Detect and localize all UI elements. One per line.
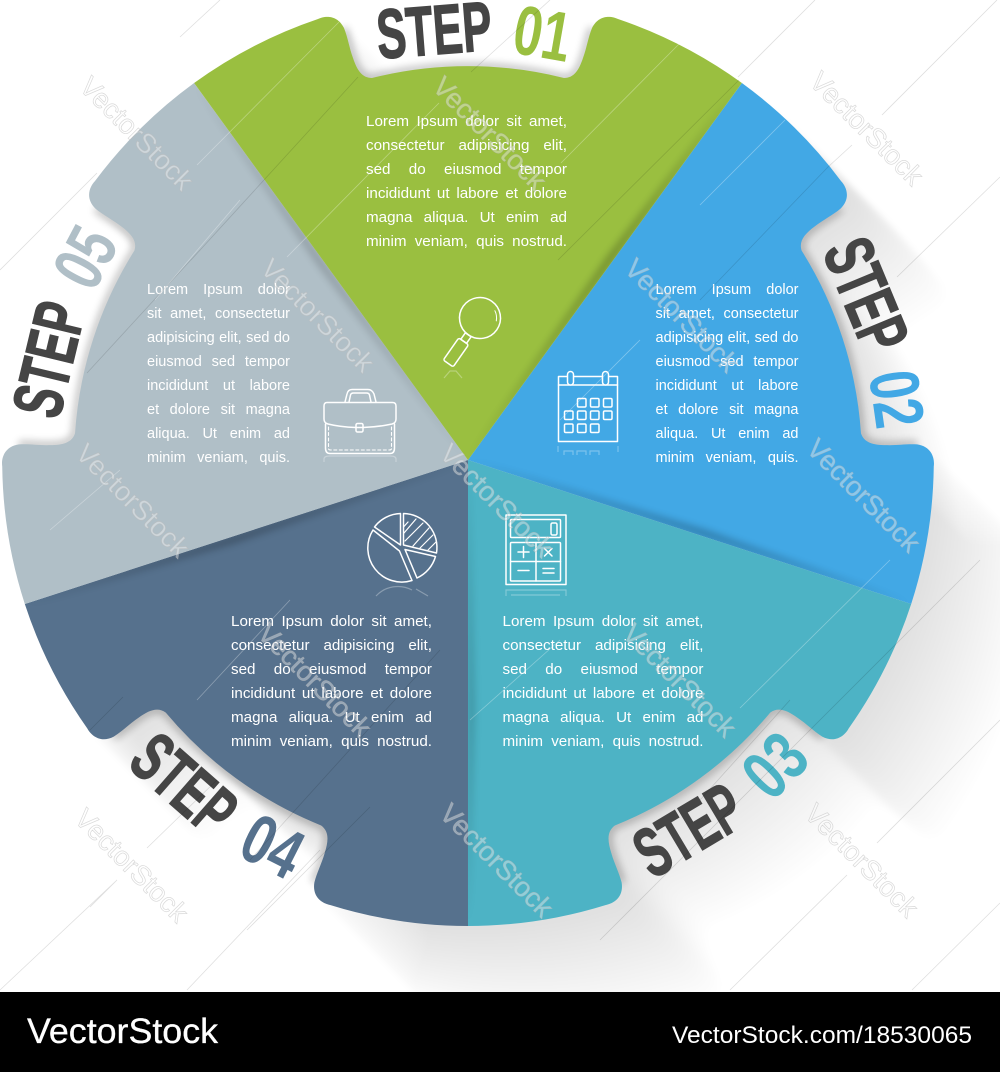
heading: step 01 <box>374 0 577 77</box>
text block: step 01: Lorem Ipsum dolor sit amet, <box>366 113 567 130</box>
text block: step 01: consectetur adipisicing elit, <box>366 137 567 154</box>
text block: step 02: minim veniam, quis. <box>656 450 798 466</box>
watermarks: VectorStock <box>804 66 930 191</box>
text block: step 05: et dolore sit magna <box>147 402 290 418</box>
watermarks <box>69 66 930 928</box>
text block: step 05: incididunt ut labore <box>147 378 290 394</box>
text block: step 02 <box>656 282 798 466</box>
watermarks: VectorStock <box>617 618 743 743</box>
text block: step 04: incididunt ut labore et dolore <box>231 685 432 702</box>
text block: step 04: magna aliqua. Ut enim ad <box>231 709 432 726</box>
heading: step 02 <box>804 224 951 445</box>
footer band <box>0 992 1000 1072</box>
text block: step 05: eiusmod sed tempor <box>147 354 290 370</box>
text block: step 04: sed do eiusmod tempor <box>231 661 432 678</box>
text block: step 02: adipisicing elit, sed do <box>656 330 798 346</box>
heading: step 03: 03 <box>727 718 824 814</box>
icon: magnifying glass <box>431 289 509 378</box>
text block: step 04 <box>231 613 432 750</box>
text block: step 05: adipisicing elit, sed do <box>147 330 290 346</box>
heading: step 03 <box>614 710 831 901</box>
heading: step 05: STEP <box>0 294 101 425</box>
text block: step 03: incididunt ut labore et dolore <box>502 685 704 702</box>
text block: step 04: minim veniam, quis nostrud. <box>231 733 432 750</box>
text block: step 03: magna aliqua. Ut enim ad <box>502 709 704 726</box>
text block: step 02: eiusmod sed tempor <box>656 354 798 370</box>
text block: step 01: minim veniam, quis nostrud. <box>366 233 567 250</box>
heading: step 04: STEP <box>116 718 252 851</box>
icon: calendar <box>558 372 618 455</box>
text block: step 01: sed do eiusmod tempor <box>366 161 567 178</box>
watermarks: VectorStock <box>74 71 200 196</box>
text block: step 01: magna aliqua. Ut enim ad <box>366 209 567 226</box>
text block: step 05: minim veniam, quis. <box>147 450 290 466</box>
watermarks: VectorStock <box>801 433 927 558</box>
text block: step 04: Lorem Ipsum dolor sit amet, <box>231 613 432 630</box>
text block: step 02: Lorem Ipsum dolor <box>656 282 798 298</box>
heading: step 02: STEP <box>808 227 924 363</box>
text block: step 04: consectetur adipisicing elit, <box>231 637 432 654</box>
text block: step 03: Lorem Ipsum dolor sit amet, <box>502 613 704 630</box>
text block: step 05: aliqua. Ut enim ad <box>147 426 290 442</box>
watermarks: VectorStock <box>255 253 381 378</box>
text block: step 02: incididunt ut labore <box>656 378 798 394</box>
text block: step 02: et dolore sit magna <box>656 402 798 418</box>
text block: step 05: Lorem Ipsum dolor <box>147 282 290 298</box>
text block: step 02: sit amet, consectetur <box>656 306 798 322</box>
text block: step 03: sed do eiusmod tempor <box>502 661 704 678</box>
watermarks: VectorStock <box>70 438 196 563</box>
footer band: VectorStock.com/18530065 <box>672 1022 972 1049</box>
panel: step 03 teal wedge <box>468 460 912 926</box>
panel: step 04 navy wedge <box>24 460 468 926</box>
watermarks: VectorStock <box>434 798 560 923</box>
watermarks: VectorStock <box>252 618 378 743</box>
watermarks: VectorStock <box>619 253 745 378</box>
text block: step 03 <box>502 613 704 750</box>
watermarks: VectorStock <box>427 71 553 196</box>
heading: step 03: STEP <box>620 768 757 893</box>
panel: step 02 blue wedge <box>468 83 934 604</box>
icon: briefcase <box>324 390 396 462</box>
footer band: VectorStock <box>27 1011 218 1051</box>
panel: step 01 green wedge <box>194 17 742 460</box>
text block: step 01 <box>366 113 567 250</box>
icon: pie chart <box>368 514 437 596</box>
heading: step 04 <box>110 713 326 905</box>
panel: step 05 gray wedge <box>2 83 468 604</box>
watermarks: VectorStock <box>69 803 195 928</box>
notch inner shadows <box>19 28 917 882</box>
heading: step 02: 02 <box>854 365 939 433</box>
text block: step 03: consectetur adipisicing elit, <box>502 637 704 654</box>
text block: step 02: aliqua. Ut enim ad <box>656 426 798 442</box>
text block: step 05: sit amet, consectetur <box>147 306 290 322</box>
icon: calculator <box>506 515 566 596</box>
heading: step 05: 05 <box>38 214 133 301</box>
text block: step 05 <box>147 282 290 466</box>
heading: step 04: 04 <box>228 799 316 895</box>
text block: step 03: minim veniam, quis nostrud. <box>502 733 704 750</box>
text block: step 01: incididunt ut labore et dolore <box>366 185 567 202</box>
watermarks: VectorStock <box>434 438 560 563</box>
heading: step 05 <box>0 210 137 431</box>
watermarks: VectorStock <box>799 798 925 923</box>
